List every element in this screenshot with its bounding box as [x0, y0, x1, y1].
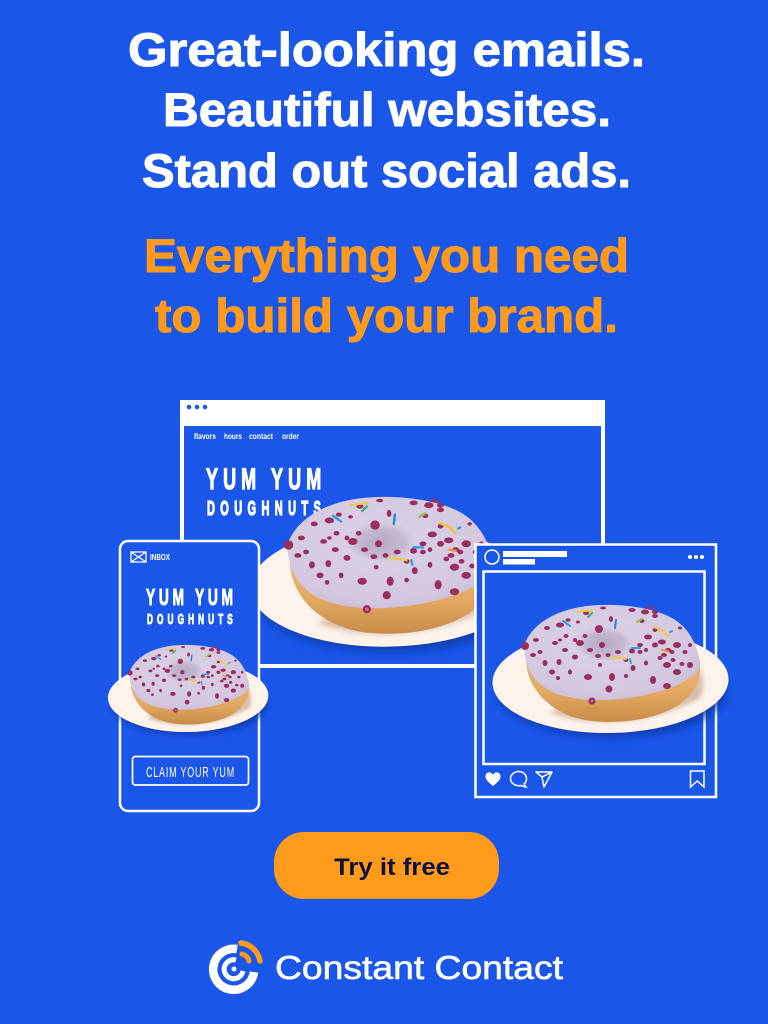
website navigation: order [282, 431, 300, 441]
heading: orange subhead: to build your brand. [155, 289, 618, 342]
icon: send [536, 772, 552, 787]
window dots [187, 405, 207, 409]
website navigation: hours [224, 431, 242, 441]
heading: white headline: Beautiful websites. [163, 83, 611, 136]
panel: phone email mockup [120, 541, 259, 811]
username bars [503, 551, 567, 564]
icon: logo mark [213, 943, 260, 990]
inbox label: INBOX [150, 553, 171, 562]
website brand title: YUM YUM [206, 464, 321, 496]
icon: comment bubble [510, 772, 526, 787]
website brand title: DOUGHNUTS [207, 498, 321, 520]
icon: heart [486, 772, 500, 786]
panel: website browser mockup [180, 400, 605, 668]
image: social doughnut [492, 605, 729, 737]
website navigation: contact [249, 431, 273, 441]
image: website doughnut [249, 497, 527, 651]
heading: orange subhead: Everything you need [144, 229, 629, 282]
website navigation [194, 431, 300, 441]
logo: constant contact [213, 943, 563, 990]
website brand title [206, 464, 321, 520]
button: claim your yum: CLAIM YOUR YUM [146, 764, 234, 781]
image: phone doughnut [107, 645, 269, 735]
menu dots [688, 555, 704, 559]
avatar [485, 550, 499, 564]
heading: white headline: Great-looking emails. [128, 23, 645, 76]
heading: white headline: Stand out social ads. [142, 144, 631, 197]
wordmark: Constant Contact [275, 949, 563, 986]
button: try it free: Try it free [334, 854, 450, 881]
button: claim your yum [132, 756, 248, 785]
phone brand title: DOUGHNUTS [147, 610, 233, 628]
icon: envelope [131, 552, 146, 562]
website navigation: flavors [194, 431, 216, 441]
heading: orange subhead [144, 229, 629, 342]
post image frame [484, 572, 704, 764]
phone brand title [146, 586, 233, 628]
phone brand title: YUM YUM [146, 586, 233, 611]
panel: social post mockup [476, 544, 716, 797]
heading: white headline [128, 23, 645, 197]
button: try it free [274, 832, 499, 899]
icon: bookmark [690, 771, 704, 787]
